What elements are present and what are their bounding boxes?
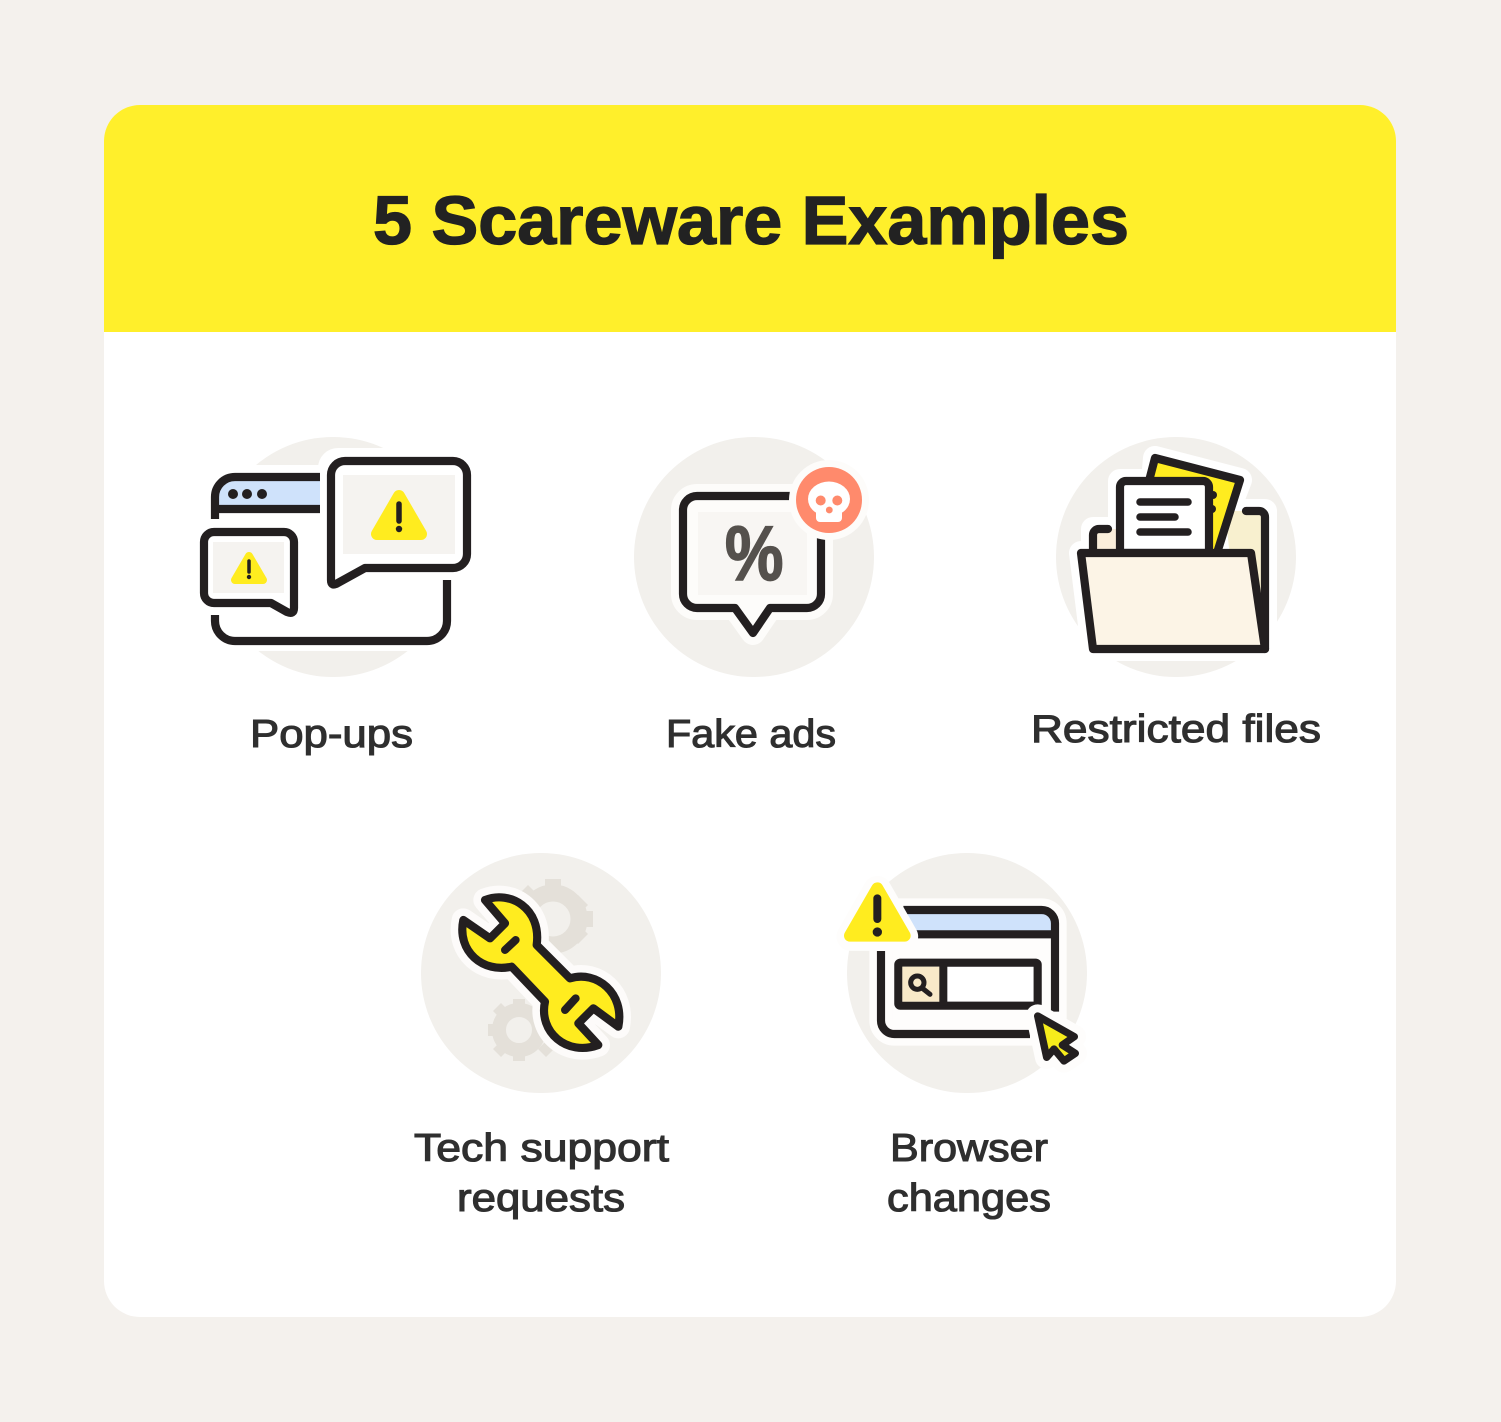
percent sign: % bbox=[725, 511, 783, 597]
skull badge bbox=[789, 460, 869, 540]
back of folder bbox=[1093, 511, 1265, 649]
wrench bbox=[462, 897, 619, 1048]
icon: restricted files bbox=[1056, 437, 1296, 677]
search bar bbox=[898, 963, 1038, 1006]
icon: browser changes bbox=[847, 853, 1087, 1093]
label: fake ads: Fake ads bbox=[666, 713, 836, 756]
label: browser changes: Browser bbox=[890, 1127, 1048, 1170]
label: tech support requests bbox=[414, 1127, 669, 1220]
title: 5 Scareware Examples bbox=[373, 182, 1129, 259]
icon: tech support bbox=[421, 853, 661, 1093]
small warning bubble bbox=[204, 532, 294, 613]
label: browser changes bbox=[887, 1127, 1051, 1220]
icon: fake ads bbox=[634, 437, 874, 677]
large warning bubble bbox=[331, 461, 467, 584]
panel: card bbox=[104, 105, 1396, 1317]
warning triangle bbox=[850, 888, 905, 937]
folder front bbox=[1081, 553, 1265, 649]
icon: pop-ups bbox=[200, 437, 480, 677]
cursor bbox=[1038, 1016, 1075, 1061]
gear top bbox=[513, 879, 593, 959]
label: tech support requests: requests bbox=[457, 1177, 625, 1220]
browser window bbox=[215, 477, 447, 641]
document bbox=[1120, 481, 1209, 553]
browser window bbox=[881, 910, 1055, 1034]
white halo bbox=[1081, 458, 1265, 649]
label: restricted files: Restricted files bbox=[1031, 708, 1321, 751]
label: pop-ups: Pop-ups bbox=[250, 713, 413, 756]
white halo bbox=[881, 910, 1055, 1034]
label: browser changes: changes bbox=[887, 1177, 1051, 1220]
label: tech support requests: Tech support bbox=[414, 1127, 669, 1170]
yellow paper bbox=[1130, 458, 1240, 553]
gear bottom bbox=[488, 999, 553, 1061]
